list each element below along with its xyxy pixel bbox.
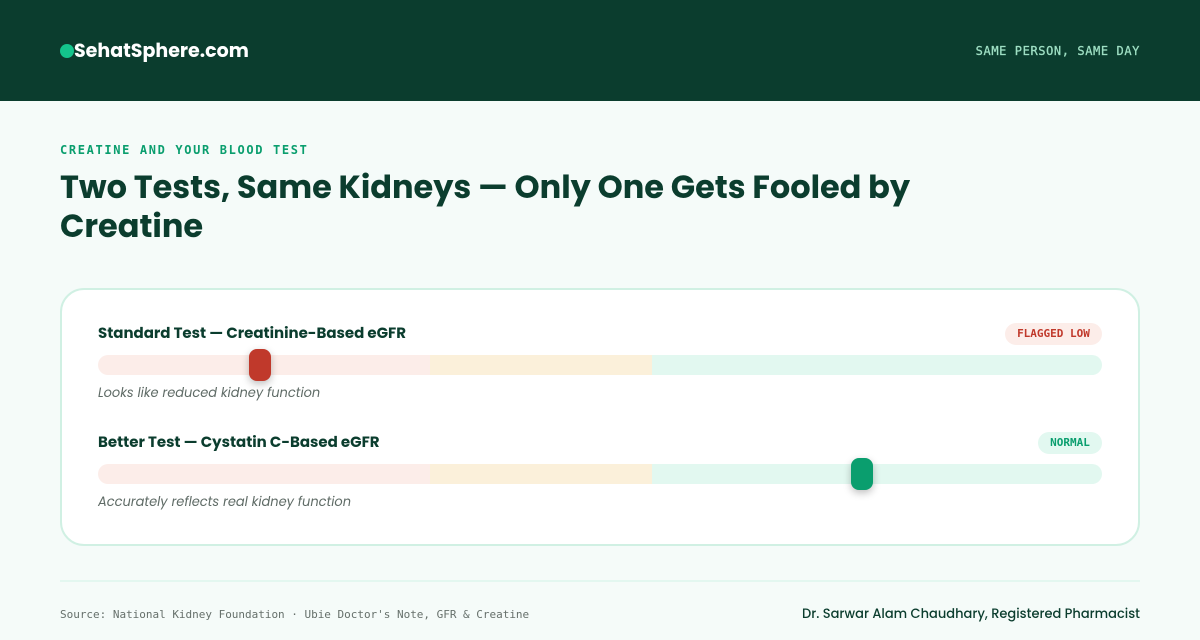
header tagline: SAME PERSON, SAME DAY xyxy=(976,44,1140,58)
better test label: Better Test — Cystatin C-Based eGFR xyxy=(98,432,380,453)
icon: logo dot xyxy=(60,44,74,58)
author credit: Dr. Sarwar Alam Chaudhary, Registered Pharmacist xyxy=(802,604,1140,623)
badge: normal: NORMAL xyxy=(1050,436,1090,449)
logo wordmark: SehatSphere.com xyxy=(74,37,249,64)
better test note: Accurately reflects real kidney function xyxy=(98,492,351,511)
better test marker xyxy=(851,458,873,490)
eyebrow: CREATINE AND YOUR BLOOD TEST xyxy=(60,143,308,157)
badge: flagged low xyxy=(1005,323,1102,345)
source text: Source: National Kidney Foundation · Ubie Doctor's Note, GFR & Creatine xyxy=(60,608,529,621)
better test range bar xyxy=(98,464,1102,484)
header band xyxy=(0,0,1200,101)
title: Two Tests, Same Kidneys — Only One Gets Fooled by Creatine xyxy=(60,165,910,249)
standard test label: Standard Test — Creatinine-Based eGFR xyxy=(98,323,406,344)
footer divider xyxy=(60,580,1140,582)
standard test marker xyxy=(249,349,271,381)
badge: flagged low: FLAGGED LOW xyxy=(1017,327,1090,340)
standard test note: Looks like reduced kidney function xyxy=(98,383,320,402)
badge: normal xyxy=(1038,432,1102,454)
standard test range bar xyxy=(98,355,1102,375)
panel: test comparison xyxy=(60,288,1140,546)
